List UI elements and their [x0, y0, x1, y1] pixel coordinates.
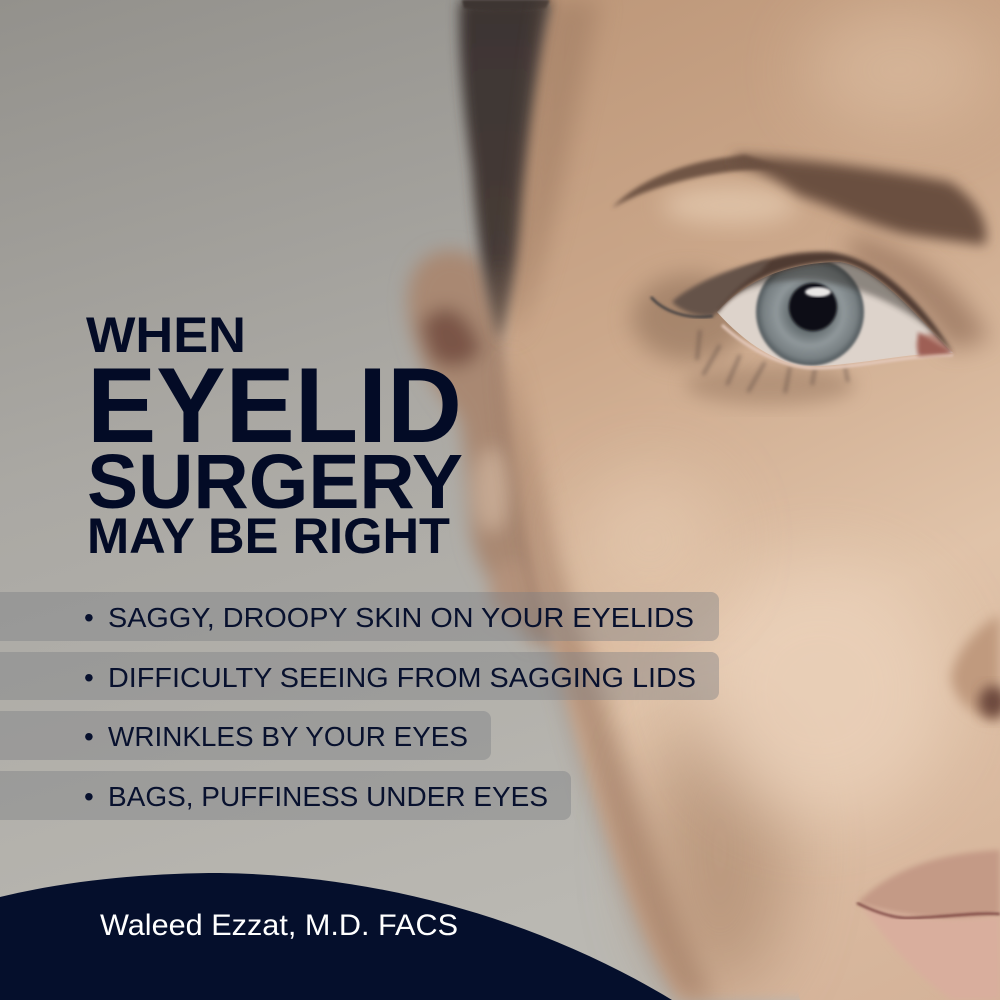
hairline shadow on temple [510, 0, 600, 340]
title line: when: WHEN [86, 307, 246, 363]
list item 3 [0, 711, 491, 760]
lower lashes [697, 330, 848, 393]
photo: face [408, 0, 1000, 1000]
list item 1: SAGGY, DROOPY SKIN ON YOUR EYELIDS [108, 602, 694, 633]
skin [500, 6, 800, 1000]
list item 3: • [84, 721, 94, 752]
symptom list [0, 592, 719, 820]
brow-bone highlight [662, 185, 798, 225]
list item 1 [0, 592, 719, 641]
jaw shadow [650, 705, 790, 995]
upper lid band [705, 252, 953, 353]
lower lid [722, 325, 953, 368]
face edge shadow [505, 350, 715, 1000]
curled lash [651, 297, 713, 317]
forehead highlight [805, 10, 995, 130]
pupil [789, 283, 837, 331]
list item 3: WRINKLES BY YOUR EYES [108, 721, 468, 752]
ear [408, 250, 570, 642]
lips [855, 848, 1000, 940]
title line: surgery: SURGERY [87, 439, 463, 525]
catchlight [805, 287, 831, 297]
lash mass [672, 260, 770, 316]
list item 4 [0, 771, 571, 820]
inner corner [918, 332, 953, 356]
title line: may be right: MAY BE RIGHT [87, 508, 450, 564]
doctor name: Waleed Ezzat, M.D. FACS [100, 909, 458, 942]
nose [951, 615, 1000, 722]
list item 2: DIFFICULTY SEEING FROM SAGGING LIDS [108, 662, 696, 693]
list item 1: • [84, 602, 94, 633]
list item 4: BAGS, PUFFINESS UNDER EYES [108, 781, 548, 812]
footer arc with doctor name [0, 873, 672, 1000]
hair top edge [461, 0, 550, 9]
cheek highlight [690, 560, 950, 820]
list item 4: • [84, 781, 94, 812]
iris [756, 258, 864, 366]
skin base [548, 0, 1000, 1000]
under-eye highlight [596, 481, 692, 574]
hair [460, 0, 552, 340]
eyebrow [612, 155, 986, 245]
list item 2 [0, 652, 719, 700]
sclera [717, 262, 953, 366]
title [86, 307, 463, 564]
list item 2: • [84, 662, 94, 693]
eye [651, 240, 955, 393]
eye socket shadow [632, 274, 748, 362]
title line: eyelid: EYELID [87, 345, 462, 465]
